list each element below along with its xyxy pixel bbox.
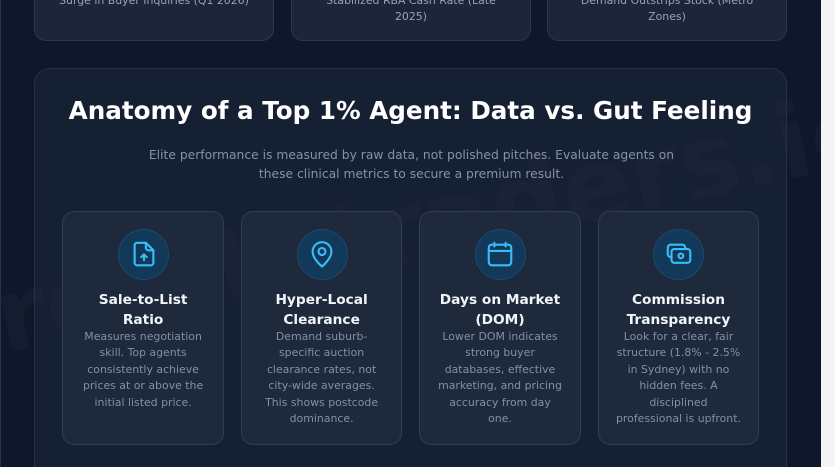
icon: map pin [297, 228, 348, 280]
card description: Measures negotiation skill. Top agents consistently achieve prices at or above the initial listed price. [83, 330, 203, 409]
stat card: buyer inquiries [34, 0, 274, 41]
stat card: demand vs stock [547, 0, 787, 41]
heading: Anatomy of a Top 1% Agent: Data vs. Gut Feeling [69, 96, 752, 125]
intro text: Elite performance is measured by raw data, not polished pitches. Evaluate agents on these clinical metrics to secure a premium result. [149, 148, 674, 181]
card: days on market [419, 211, 581, 445]
card: sale-to-list ratio [62, 211, 224, 445]
card title: Sale-to-List Ratio [99, 292, 187, 328]
stat card: RBA cash rate [291, 0, 531, 41]
panel: anatomy of a top agent [34, 68, 787, 467]
card: hyper-local clearance [241, 211, 402, 445]
card title: Hyper-Local Clearance [275, 292, 368, 328]
card: commission transparency [598, 211, 759, 445]
card title: Commission Transparency [627, 292, 730, 328]
card description: Look for a clear, fair structure (1.8% - 2.5% in Sydney) with no hidden fees. A disciplined professional is upfront. [616, 330, 741, 425]
card description: Demand suburb-specific auction clearance rates, not city-wide averages. This shows postcode dominance. [265, 330, 378, 425]
card title: Days on Market (DOM) [440, 292, 560, 328]
card description: Lower DOM indicates strong buyer databases, effective marketing, and pricing accuracy from day one. [438, 330, 562, 425]
icon: document upload [118, 228, 169, 280]
icon: banknotes [653, 228, 704, 280]
icon: calendar [475, 228, 526, 280]
